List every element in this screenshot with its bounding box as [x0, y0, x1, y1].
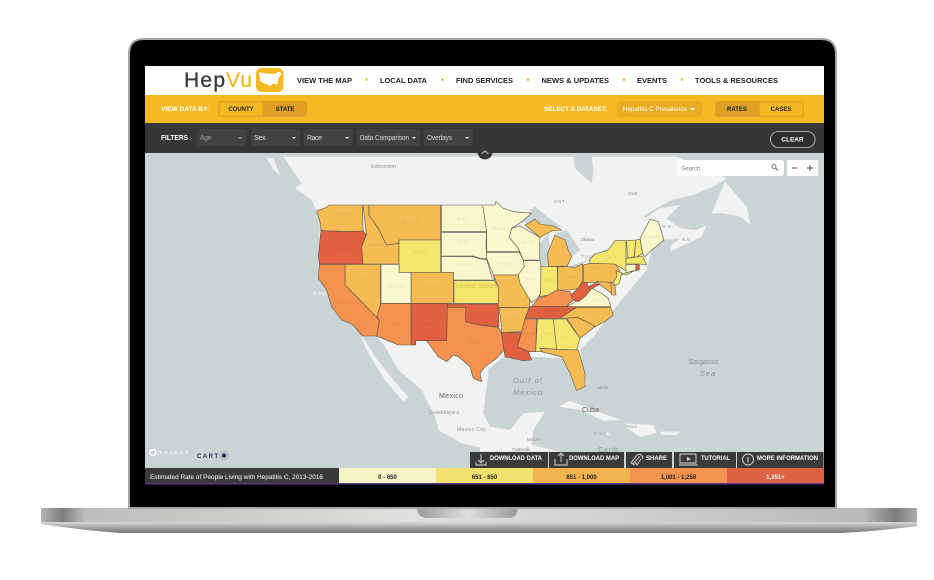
choropleth: eastern states: IND.: [545, 278, 558, 284]
choropleth: eastern states: OHIO: [563, 274, 579, 280]
choropleth: western states: S.D.: [458, 239, 471, 245]
choropleth: eastern states: [483, 202, 664, 391]
navigation: EVENTS: [637, 76, 667, 85]
map place labels: Mexico: [513, 388, 542, 397]
choropleth: western states: N.M.: [423, 321, 437, 327]
button: download map: DOWNLOAD MAP: [569, 456, 619, 462]
filter dropdowns: Age: [200, 135, 212, 142]
legend bin 851-1000: 851 - 1,000: [566, 475, 597, 481]
map place labels: San Jose: [313, 291, 346, 297]
map place labels: Bahamas: [597, 385, 609, 390]
map place labels: Carib: [598, 447, 618, 454]
map place labels: Tor: [581, 254, 592, 259]
button: share: [626, 452, 672, 468]
search box: [677, 160, 784, 176]
legend bin 0-650: 0 - 650: [378, 475, 397, 481]
button: more information: [737, 452, 824, 468]
choropleth: western states: ARIZ.: [388, 322, 405, 328]
map place labels: Ottawa: [581, 237, 594, 242]
choropleth: western states: TEX.: [467, 339, 480, 345]
choropleth: eastern states: ARK.: [505, 316, 520, 322]
navigation: LOCAL DATA: [380, 76, 428, 85]
choropleth: eastern states: MISS.: [522, 331, 539, 337]
legend: [145, 468, 824, 484]
map place labels: Mexico City: [457, 427, 486, 433]
view data by toggle: VIEW DATA BY:: [161, 106, 209, 113]
choropleth: western states: [317, 205, 504, 382]
choropleth: eastern states: N.C.: [583, 311, 596, 317]
choropleth: western states: CALIF.: [338, 300, 357, 306]
legend bin 1251+: [727, 468, 824, 483]
navigation: [297, 76, 778, 85]
choropleth: eastern states: GA.: [562, 334, 573, 340]
legend bin 851-1000: [533, 468, 630, 483]
choropleth: eastern states: ILL.: [525, 276, 537, 282]
map place labels: Guatemala: [512, 447, 530, 452]
legend bin 651-850: 651 - 850: [472, 475, 498, 481]
great lakes: [513, 207, 608, 267]
legend bin 1251+: 1,251+: [766, 475, 785, 481]
choropleth: eastern states: VA.: [592, 298, 602, 304]
choropleth: western states: N.D.: [457, 217, 469, 223]
choropleth: eastern states: TENN.: [542, 308, 560, 314]
navigation: NEWS & UPDATES: [542, 76, 609, 85]
choropleth: eastern states: N.Y.: [607, 254, 619, 260]
choropleth: eastern states: ALA.: [542, 331, 556, 337]
legend bin 1001-1250: [630, 468, 727, 483]
button: download data: [470, 452, 548, 468]
choropleth: western states: ORE.: [337, 246, 352, 252]
choropleth: western states: MONT.: [402, 219, 421, 225]
choropleth: western states: IDAHO: [368, 243, 387, 249]
choropleth: eastern states: MAINE: [643, 234, 662, 240]
mapbox and carto attribution: CART: [197, 454, 220, 460]
map place labels: N.B.: [662, 224, 673, 229]
map panel: [145, 153, 824, 469]
choropleth: western states: NEBR.: [457, 263, 476, 269]
laptop base: [41, 508, 917, 533]
map place labels: Sea: [700, 369, 715, 378]
map place labels: Gulf of: [513, 376, 543, 385]
map place labels: QUE.: [628, 191, 639, 196]
legend bin 651-850: [436, 468, 533, 483]
map land: [267, 157, 751, 452]
dataset selector: [544, 101, 702, 117]
yellow data selection bar: [145, 95, 824, 123]
button: download map: [549, 452, 624, 468]
collapse tab: [478, 144, 492, 160]
view data by toggle: COUNTY: [228, 107, 254, 113]
filter dropdowns: Sex: [254, 135, 266, 142]
logo: [184, 68, 284, 92]
view data by toggle: STATE: [276, 107, 294, 113]
button: download data: DOWNLOAD DATA: [490, 456, 543, 462]
map place labels: Jamaica: [593, 431, 606, 436]
clear button: [770, 132, 815, 148]
button: more information: MORE INFORMATION: [757, 456, 818, 462]
navigation: VIEW THE MAP: [297, 76, 352, 85]
map place labels: Belize: [527, 437, 540, 442]
choropleth: eastern states: PA.: [590, 266, 600, 272]
rates cases toggle: RATES: [727, 107, 747, 113]
choropleth: western states: UTAH: [388, 283, 404, 289]
map place labels: [313, 164, 718, 454]
toolbar buttons: [470, 452, 824, 468]
logo: Hep: [184, 69, 225, 92]
header bar: [145, 66, 824, 95]
choropleth: eastern states: MINN.: [493, 226, 510, 232]
view data by toggle: [161, 101, 307, 117]
mapbox and carto attribution: mapbox: [158, 450, 188, 456]
legend bin 0-650: [339, 468, 436, 483]
legend: Estimated Rate of People Living with Hepatitis C, 2013-2016: [150, 474, 323, 481]
choropleth: eastern states: IOWA: [498, 261, 514, 267]
zoom controls: [787, 160, 818, 176]
dataset selector: SELECT A DATASET:: [544, 106, 607, 113]
map place labels: Cuba: [582, 407, 599, 414]
choropleth: western states: WASH.: [337, 211, 356, 217]
map place labels: ONT.: [554, 199, 566, 204]
choropleth: western states: NEV.: [358, 277, 372, 283]
filter dropdowns: [197, 129, 473, 146]
dataset selector: Hepatitis C Prevalence: [623, 106, 687, 113]
logo: Vu: [226, 69, 252, 92]
map place labels: Mexico: [439, 393, 463, 400]
filter dropdowns: Race: [307, 135, 322, 142]
navigation: FIND SERVICES: [456, 76, 513, 85]
button: tutorial: [674, 452, 736, 468]
filter bar: [145, 123, 824, 153]
map place labels: Edmonton: [371, 164, 396, 170]
legend bin 1001-1250: 1,001 - 1,250: [661, 475, 697, 481]
button: tutorial: TUTORIAL: [701, 456, 730, 462]
mapbox and carto attribution: [150, 450, 229, 460]
country label: United States: United States: [456, 281, 497, 290]
choropleth: western states: WYO.: [413, 249, 429, 255]
map place labels: N.S.: [682, 237, 691, 242]
navigation: TOOLS & RESOURCES: [695, 76, 778, 85]
clear button: CLEAR: [781, 136, 804, 144]
map place labels: Haiti: [627, 424, 637, 429]
choropleth: eastern states: WIS.: [522, 239, 535, 245]
rates cases toggle: CASES: [771, 107, 791, 113]
choropleth: western states: COLO.: [423, 284, 442, 290]
button: share: SHARE: [646, 456, 667, 462]
laptop bezel: [129, 39, 836, 508]
search box: Search: [681, 166, 701, 172]
filter dropdowns: Overlays: [427, 135, 452, 142]
filter dropdowns: Data Comparison: [360, 135, 409, 142]
map place labels: Guadalajara: [429, 410, 459, 416]
rates cases toggle: [715, 101, 804, 117]
map place labels: Sargasso: [688, 357, 718, 366]
filter bar: FILTERS: [161, 135, 188, 142]
